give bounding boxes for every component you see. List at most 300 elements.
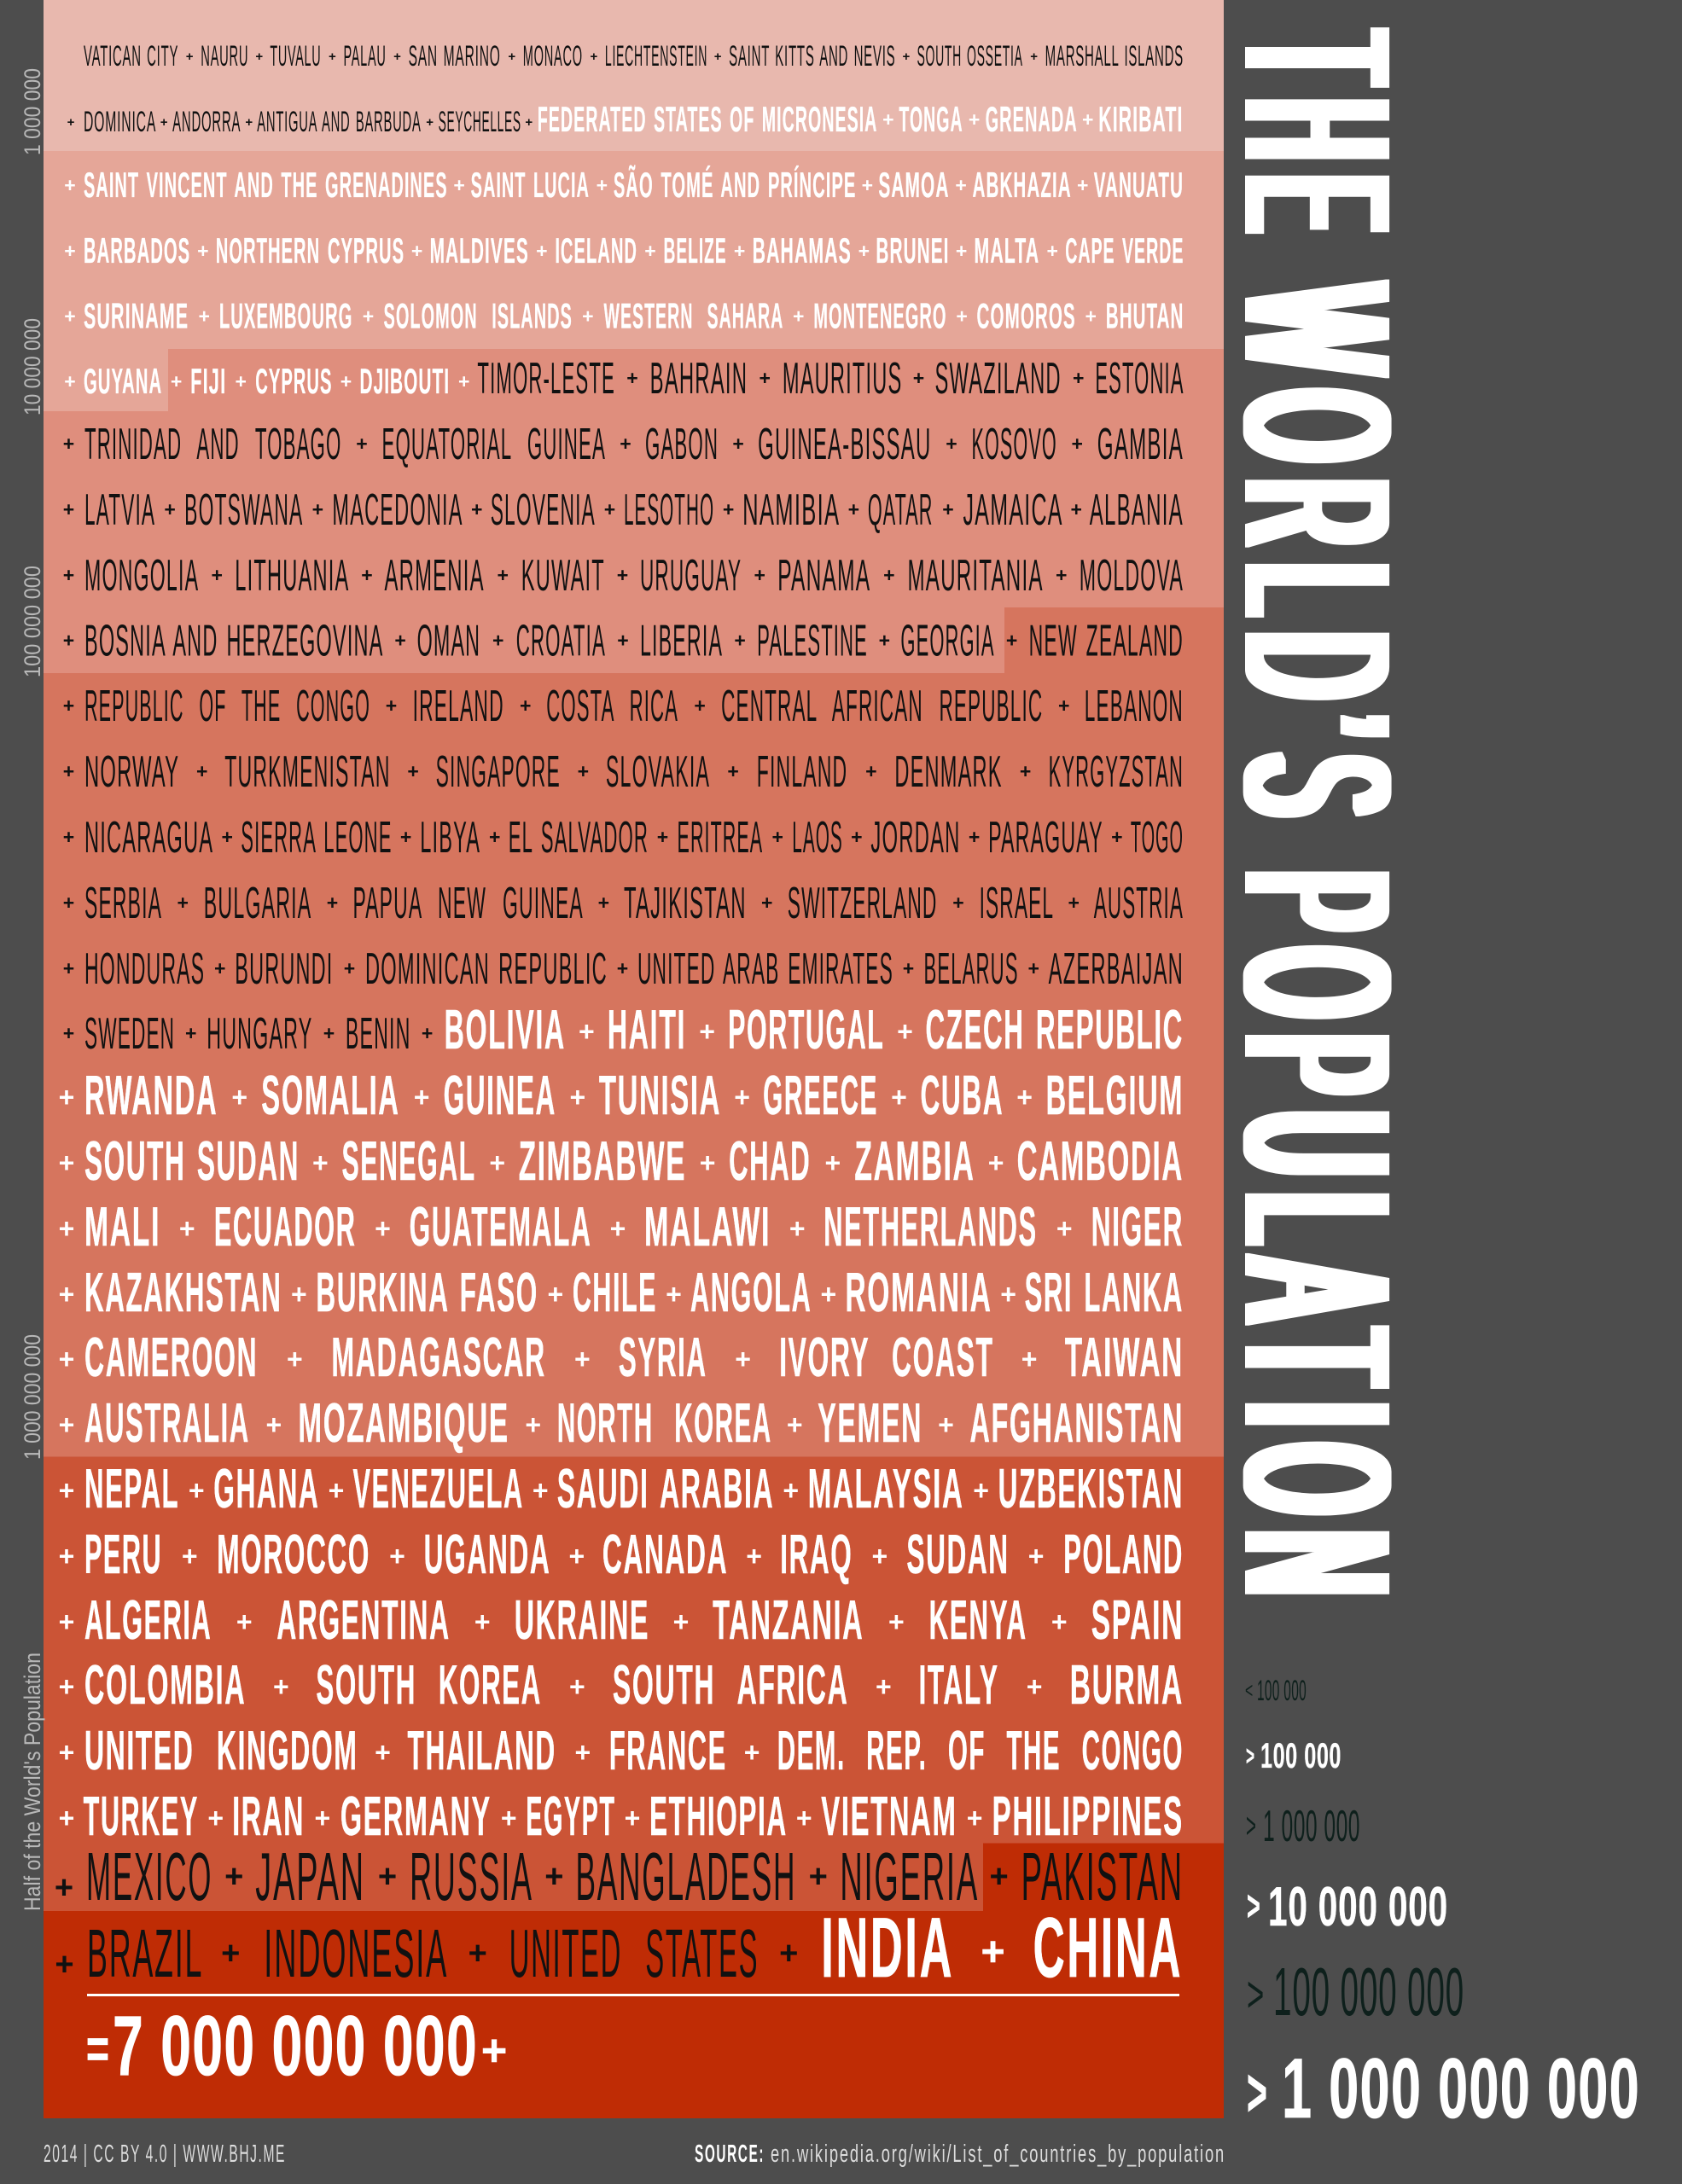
- row 27: United Kingdom to Dem. Rep. of the Congo: FRANCE: [609, 1719, 727, 1781]
- total: 7 000 000 000+: 7 000 000 000: [113, 1998, 478, 2093]
- legend item: over 100 000: >: [1246, 1740, 1255, 1771]
- row 16: Sweden to Czech Republic: ++++: [63, 1022, 433, 1044]
- row 18: South Sudan to Cambodia: CHAD: [729, 1130, 811, 1192]
- row 23: Nepal to Uzbekistan: SAUDI ARABIA: [557, 1457, 774, 1519]
- infographic: the world's population: AZERBAIJAN: [1049, 944, 1184, 994]
- row 15: Honduras to Azerbaijan: BELARUS: [923, 944, 1019, 994]
- row 4: Barbados to Cape Verde: BARBADOS: [84, 230, 190, 270]
- footer: source: en.wikipedia.org/wiki/List_of_countries_by_population: [771, 2140, 1225, 2168]
- row 5: Suriname to Bhutan: LUXEMBOURG: [219, 296, 352, 335]
- title: THE WORLD'S POPULATION: THE: [1203, 32, 1432, 247]
- row 29: Mexico to Pakistan: [55, 1838, 1184, 1914]
- row 22: Australia to Afghanistan: MOZAMBIQUE: [298, 1391, 509, 1454]
- row 11: Republic of the Congo to Lebanon: IRELAND: [413, 682, 504, 731]
- row 1: Vatican City to Marshall Islands: MONACO: [523, 40, 583, 73]
- row 30: Brazil to China: [55, 1900, 1183, 1995]
- row 18: South Sudan to Cambodia: ZAMBIA: [854, 1130, 975, 1192]
- axis labels: cumulative population: 1 000 000: [20, 68, 45, 155]
- row 10: Bosnia and Herzegovina to New Zealand: BOSNIA AND HERZEGOVINA: [84, 617, 384, 665]
- row 11: Republic of the Congo to Lebanon: [63, 682, 1184, 731]
- row 21: Cameroon to Taiwan: SYRIA: [619, 1326, 707, 1388]
- row 16: Sweden to Czech Republic: [63, 998, 1184, 1060]
- row 14: Serbia to Austria: TAJIKISTAN: [624, 879, 747, 928]
- row 20: Kazakhstan to Sri Lanka: BURKINA FASO: [316, 1261, 538, 1323]
- legend item: over 10 000 000: >: [1247, 1882, 1261, 1930]
- row 14: Serbia to Austria: SERBIA: [84, 879, 162, 928]
- band: over 100 000: [44, 151, 1224, 411]
- row 8: Latvia to Albania: LESOTHO: [624, 485, 714, 535]
- row 25: Algeria to Spain: KENYA: [928, 1589, 1027, 1651]
- row 22: Australia to Afghanistan: +++++: [59, 1409, 954, 1440]
- row 28: Turkey to Philippines: +++++++: [59, 1803, 982, 1833]
- total: 7 000 000 000+: +: [481, 2026, 507, 2076]
- row 15: Honduras to Azerbaijan: DOMINICAN REPUBLIC: [365, 944, 608, 994]
- row 12: Norway to Kyrgyzstan: TURKMENISTAN: [224, 747, 391, 797]
- row 6: Guyana to Estonia: [64, 354, 1184, 404]
- row 5: Suriname to Bhutan: SOLOMON ISLANDS: [384, 296, 573, 335]
- row 22: Australia to Afghanistan: YEMEN: [818, 1391, 922, 1454]
- legend: population size scale: 100 000 000: [1273, 1954, 1464, 2030]
- row 6: Guyana to Estonia: ++++: [626, 367, 1084, 389]
- row 23: Nepal to Uzbekistan: ++++++: [59, 1475, 989, 1506]
- row 1: Vatican City to Marshall Islands: VATICAN CITY: [84, 40, 178, 73]
- row 16: Sweden to Czech Republic: HUNGARY: [207, 1009, 312, 1059]
- row 8: Latvia to Albania: +++++++++: [63, 498, 1082, 520]
- row 19: Mali to Niger: [59, 1195, 1184, 1258]
- row 10: Bosnia and Herzegovina to New Zealand: OMAN: [417, 617, 480, 665]
- row 26: Colombia to Burma: SOUTH AFRICA: [613, 1653, 848, 1716]
- row 20: Kazakhstan to Sri Lanka: ANGOLA: [690, 1261, 812, 1323]
- row 22: Australia to Afghanistan: [59, 1391, 1184, 1454]
- infographic: the world's population: UZBEKISTAN: [998, 1457, 1184, 1519]
- row 13: Nicaragua to Togo: LAOS: [792, 813, 843, 863]
- row 2: Dominica to Kiribati: DOMINICA: [84, 106, 156, 138]
- row 13: Nicaragua to Togo: JORDAN: [870, 813, 961, 863]
- row 2: Dominica to Kiribati: GRENADA: [986, 99, 1078, 139]
- row 28: Turkey to Philippines: PHILIPPINES: [992, 1785, 1184, 1847]
- row 21: Cameroon to Taiwan: CAMEROON: [84, 1326, 258, 1388]
- row 16: Sweden to Czech Republic: HAITI: [608, 998, 686, 1060]
- row 13: Nicaragua to Togo: SIERRA LEONE: [241, 813, 393, 863]
- row 4: Barbados to Cape Verde: [64, 230, 1184, 270]
- row 13: Nicaragua to Togo: +++++++++: [63, 826, 1123, 848]
- infographic: the world's population: NIGER: [1091, 1195, 1184, 1258]
- row 20: Kazakhstan to Sri Lanka: CHILE: [573, 1261, 657, 1323]
- row 5: Suriname to Bhutan: +++++++: [64, 305, 1097, 327]
- axis labels: cumulative population: 1 000 000 000: [20, 1334, 45, 1460]
- row 28: Turkey to Philippines: ETHIOPIA: [649, 1785, 788, 1847]
- row 21: Cameroon to Taiwan: [59, 1326, 1184, 1388]
- row 9: Mongolia to Moldova: [63, 551, 1184, 601]
- row 26: Colombia to Burma: [59, 1653, 1184, 1716]
- row 12: Norway to Kyrgyzstan: SINGAPORE: [436, 747, 561, 797]
- row 11: Republic of the Congo to Lebanon: REPUBLIC OF THE CONGO: [84, 682, 370, 731]
- row 4: Barbados to Cape Verde: NORTHERN CYPRUS: [216, 230, 404, 270]
- row 8: Latvia to Albania: [63, 485, 1184, 535]
- row 2: Dominica to Kiribati: SEYCHELLES: [439, 106, 521, 138]
- row 9: Mongolia to Moldova: ARMENIA: [385, 551, 485, 601]
- row 29: Mexico to Pakistan: RUSSIA: [410, 1838, 533, 1914]
- row 18: South Sudan to Cambodia: ++++++: [59, 1147, 1004, 1178]
- row 7: Trinidad and Tobago to Gambia: [63, 420, 1184, 469]
- text block: country rows: [55, 40, 1184, 1995]
- row 7: Trinidad and Tobago to Gambia: EQUATORIAL GUINEA: [382, 420, 606, 469]
- footer: credit: 2014 | CC BY 4.0 | WWW.BHJ.ME: [44, 2140, 286, 2168]
- row 28: Turkey to Philippines: EGYPT: [526, 1785, 615, 1847]
- row 26: Colombia to Burma: ITALY: [918, 1653, 999, 1716]
- row 25: Algeria to Spain: UKRAINE: [515, 1589, 649, 1651]
- legend item: over 1 000 000 000: >: [1247, 2054, 1269, 2130]
- axis labels: cumulative population: Half of the World's Population: [20, 1653, 45, 1911]
- row 27: United Kingdom to Dem. Rep. of the Congo: UNITED KINGDOM: [84, 1719, 358, 1781]
- row 1: Vatican City to Marshall Islands: SAINT KITTS AND NEVIS: [729, 40, 895, 73]
- text block: country rows: BELGIUM: [1046, 1064, 1184, 1126]
- row 23: Nepal to Uzbekistan: NEPAL: [84, 1457, 179, 1519]
- row 11: Republic of the Congo to Lebanon: COSTA RICA: [546, 682, 678, 731]
- row 4: Barbados to Cape Verde: BAHAMAS: [753, 230, 852, 270]
- row 27: United Kingdom to Dem. Rep. of the Congo: [59, 1719, 1184, 1781]
- infographic: the world's population: SRI LANKA: [1025, 1261, 1184, 1323]
- row 19: Mali to Niger: MALI: [84, 1195, 160, 1258]
- row 14: Serbia to Austria: ISRAEL: [980, 879, 1054, 928]
- footer: source: SOURCE:: [695, 2140, 765, 2168]
- row 19: Mali to Niger: ++++++: [59, 1213, 1073, 1244]
- row 8: Latvia to Albania: NAMIBIA: [742, 485, 840, 535]
- row 25: Algeria to Spain: ARGENTINA: [276, 1589, 451, 1651]
- row 15: Honduras to Azerbaijan: BURUNDI: [235, 944, 333, 994]
- row 28: Turkey to Philippines: IRAN: [232, 1785, 305, 1847]
- row 13: Nicaragua to Togo: NICARAGUA: [84, 813, 213, 863]
- infographic: the world's population: ESTONIA: [1095, 354, 1184, 404]
- row 24: Peru to Poland: [59, 1523, 1184, 1585]
- row 22: Australia to Afghanistan: AUSTRALIA: [84, 1391, 250, 1454]
- row 28: Turkey to Philippines: GERMANY: [340, 1785, 492, 1847]
- row 9: Mongolia to Moldova: ++++++++: [63, 564, 1067, 586]
- row 8: Latvia to Albania: BOTSWANA: [184, 485, 303, 535]
- row 29: Mexico to Pakistan: NIGERIA: [840, 1838, 979, 1914]
- band: over 100 000 000: [44, 1457, 1224, 1911]
- infographic: the world's population: DEM. REP. OF THE CONGO: [777, 1719, 1184, 1781]
- legend: population size scale: 100 000: [1257, 1675, 1307, 1707]
- infographic: the world's population: KYRGYZSTAN: [1049, 747, 1184, 797]
- row 10: Bosnia and Herzegovina to New Zealand: +++++++: [63, 630, 1017, 651]
- row 17: Rwanda to Belgium: GUINEA: [444, 1064, 556, 1126]
- row 15: Honduras to Azerbaijan: ++++++: [63, 957, 1039, 979]
- row 6: Guyana to Estonia: MAURITIUS: [783, 354, 902, 404]
- row 1: Vatican City to Marshall Islands: +++++++++: [186, 49, 1038, 64]
- legend: population size scale: 1 000 000: [1263, 1802, 1360, 1851]
- row 4: Barbados to Cape Verde: BRUNEI: [876, 230, 950, 270]
- row 16: Sweden to Czech Republic: +++: [579, 1016, 913, 1047]
- title: THE WORLD'S POPULATION: WORLD’S: [1203, 286, 1432, 834]
- text block: country rows: VANUATU: [1094, 165, 1184, 205]
- infographic: the world's population: TOGO: [1131, 813, 1184, 863]
- row 13: Nicaragua to Togo: LIBYA: [420, 813, 480, 863]
- row 6: Guyana to Estonia: DJIBOUTI: [359, 361, 450, 401]
- band: over 10 000 000: [44, 607, 1224, 1457]
- row 24: Peru to Poland: IRAQ: [780, 1523, 853, 1585]
- row 28: Turkey to Philippines: VIETNAM: [821, 1785, 957, 1847]
- row 19: Mali to Niger: MALAWI: [644, 1195, 771, 1258]
- axis labels: cumulative population: 100 000 000: [20, 566, 45, 677]
- row 26: Colombia to Burma: SOUTH KOREA: [316, 1653, 542, 1716]
- row 12: Norway to Kyrgyzstan: NORWAY: [84, 747, 179, 797]
- legend: population size scale: [1245, 1675, 1640, 2135]
- row 29: Mexico to Pakistan: BANGLADESH: [575, 1838, 796, 1914]
- row 10: Bosnia and Herzegovina to New Zealand: GEORGIA: [900, 617, 995, 665]
- infographic: the world's population: MOLDOVA: [1080, 551, 1184, 601]
- row 1: Vatican City to Marshall Islands: PALAU: [343, 40, 387, 73]
- row 19: Mali to Niger: NETHERLANDS: [824, 1195, 1038, 1258]
- row 14: Serbia to Austria: +++++++: [63, 892, 1080, 914]
- row 19: Mali to Niger: GUATEMALA: [410, 1195, 591, 1258]
- row 17: Rwanda to Belgium: [59, 1064, 1184, 1126]
- row 24: Peru to Poland: MOROCCO: [217, 1523, 370, 1585]
- row 18: South Sudan to Cambodia: SENEGAL: [341, 1130, 476, 1192]
- infographic: the world's population: AFGHANISTAN: [970, 1391, 1184, 1454]
- row 25: Algeria to Spain: [59, 1589, 1184, 1651]
- row 30: Brazil to China: BRAZIL: [87, 1915, 203, 1991]
- row 8: Latvia to Albania: LATVIA: [84, 485, 155, 535]
- footer: source: [695, 2140, 1225, 2168]
- row 25: Algeria to Spain: ALGERIA: [84, 1589, 212, 1651]
- row 28: Turkey to Philippines: TURKEY: [84, 1785, 199, 1847]
- legend item: over 1 000 000: >: [1246, 1805, 1257, 1845]
- row 6: Guyana to Estonia: BAHRAIN: [650, 354, 748, 404]
- row 13: Nicaragua to Togo: EL SALVADOR: [509, 813, 649, 863]
- infographic: the world's population: POLAND: [1063, 1523, 1184, 1585]
- row 26: Colombia to Burma: BURMA: [1070, 1653, 1184, 1716]
- row 9: Mongolia to Moldova: MONGOLIA: [84, 551, 199, 601]
- row 10: Bosnia and Herzegovina to New Zealand: LIBERIA: [640, 617, 723, 665]
- row 6: Guyana to Estonia: GUYANA: [84, 361, 162, 401]
- total: 7 000 000 000+: =: [86, 2017, 109, 2080]
- row 14: Serbia to Austria: [63, 879, 1184, 928]
- row 2: Dominica to Kiribati: ANTIGUA AND BARBUDA: [257, 106, 422, 138]
- row 12: Norway to Kyrgyzstan: [63, 747, 1184, 797]
- row 6: Guyana to Estonia: FIJI: [190, 361, 226, 401]
- row 13: Nicaragua to Togo: PARAGUAY: [988, 813, 1103, 863]
- row 15: Honduras to Azerbaijan: [63, 944, 1184, 994]
- row 7: Trinidad and Tobago to Gambia: GABON: [645, 420, 719, 469]
- row 7: Trinidad and Tobago to Gambia: TRINIDAD AND TOBAGO: [84, 420, 341, 469]
- row 10: Bosnia and Herzegovina to New Zealand: [63, 617, 1184, 665]
- row 30: Brazil to China: +: [981, 1930, 1005, 1975]
- row 30: Brazil to China: INDONESIA: [264, 1915, 448, 1991]
- row 18: South Sudan to Cambodia: CAMBODIA: [1017, 1130, 1184, 1192]
- row 27: United Kingdom to Dem. Rep. of the Congo: THAILAND: [408, 1719, 556, 1781]
- infographic: the world's population: NEW ZEALAND: [1029, 617, 1184, 665]
- legend item: over 100 000 000: >: [1247, 1966, 1266, 2023]
- row 18: South Sudan to Cambodia: [59, 1130, 1184, 1192]
- row 24: Peru to Poland: PERU: [84, 1523, 162, 1585]
- legend item: over 100 000: 100 000: [1260, 1735, 1342, 1775]
- row 1: Vatican City to Marshall Islands: SOUTH OSSETIA: [917, 40, 1023, 73]
- row 16: Sweden to Czech Republic: BENIN: [346, 1009, 411, 1059]
- row 21: Cameroon to Taiwan: IVORY COAST: [779, 1326, 994, 1388]
- row 2: Dominica to Kiribati: +++: [882, 108, 1093, 131]
- row 26: Colombia to Burma: COLOMBIA: [84, 1653, 246, 1716]
- row 9: Mongolia to Moldova: LITHUANIA: [235, 551, 349, 601]
- legend item: under 100 000: <: [1245, 1677, 1254, 1703]
- total rule: [87, 1994, 1179, 1996]
- row 9: Mongolia to Moldova: KUWAIT: [521, 551, 605, 601]
- row 24: Peru to Poland: UGANDA: [424, 1523, 550, 1585]
- row 29: Mexico to Pakistan: MEXICO: [86, 1838, 212, 1914]
- row 13: Nicaragua to Togo: ERITREA: [678, 813, 763, 863]
- row 17: Rwanda to Belgium: +++++++: [59, 1082, 1033, 1112]
- row 3: Saint Vincent to Vanuatu: SAINT LUCIA: [471, 165, 590, 205]
- row 9: Mongolia to Moldova: URUGUAY: [640, 551, 742, 601]
- row 6: Guyana to Estonia: SWAZILAND: [934, 354, 1062, 404]
- row 3: Saint Vincent to Vanuatu: [64, 165, 1184, 205]
- infographic: the world's population: BHUTAN: [1106, 296, 1184, 335]
- row 19: Mali to Niger: ECUADOR: [214, 1195, 356, 1258]
- row 8: Latvia to Albania: MACEDONIA: [332, 485, 463, 535]
- row 27: United Kingdom to Dem. Rep. of the Congo: ++++: [59, 1737, 760, 1768]
- legend item: over 10 000 000: 10 000 000: [1268, 1875, 1448, 1937]
- row 16: Sweden to Czech Republic: PORTUGAL: [728, 998, 884, 1060]
- row 21: Cameroon to Taiwan: TAIWAN: [1065, 1326, 1184, 1388]
- row 17: Rwanda to Belgium: GREECE: [763, 1064, 878, 1126]
- row 3: Saint Vincent to Vanuatu: SAINT VINCENT AND THE GRENADINES: [84, 165, 448, 205]
- row 23: Nepal to Uzbekistan: MALAYSIA: [808, 1457, 964, 1519]
- legend item: over 1 000 000: [1246, 1802, 1360, 1851]
- row 21: Cameroon to Taiwan: +++++: [59, 1344, 1038, 1374]
- row 2: Dominica to Kiribati: TONGA: [899, 99, 963, 139]
- band: under 100 000: [44, 0, 1224, 151]
- row 4: Barbados to Cape Verde: MALDIVES: [430, 230, 529, 270]
- row 3: Saint Vincent to Vanuatu: ++++++: [64, 174, 1088, 196]
- row 20: Kazakhstan to Sri Lanka: ROMANIA: [845, 1261, 992, 1323]
- row 18: South Sudan to Cambodia: ZIMBABWE: [519, 1130, 686, 1192]
- infographic: the world's population: PAKISTAN: [1021, 1838, 1184, 1914]
- row 30: Brazil to China: CHINA: [1033, 1900, 1183, 1995]
- axis labels: cumulative population: [20, 68, 45, 1911]
- row 7: Trinidad and Tobago to Gambia: KOSOVO: [972, 420, 1057, 469]
- row 5: Suriname to Bhutan: COMOROS: [977, 296, 1076, 335]
- row 20: Kazakhstan to Sri Lanka: KAZAKHSTAN: [84, 1261, 282, 1323]
- row 20: Kazakhstan to Sri Lanka: ++++++: [59, 1279, 1016, 1310]
- row 29: Mexico to Pakistan: +: [55, 1870, 73, 1906]
- row 15: Honduras to Azerbaijan: HONDURAS: [84, 944, 205, 994]
- row 6: Guyana to Estonia: TIMOR-LESTE: [477, 354, 615, 404]
- row 24: Peru to Poland: CANADA: [602, 1523, 728, 1585]
- row 25: Algeria to Spain: SPAIN: [1091, 1589, 1184, 1651]
- row 1: Vatican City to Marshall Islands: LIECHTENSTEIN: [605, 40, 707, 73]
- row 14: Serbia to Austria: PAPUA NEW GUINEA: [352, 879, 584, 928]
- infographic: the world's population: ALBANIA: [1090, 485, 1184, 535]
- row 20: Kazakhstan to Sri Lanka: [59, 1261, 1184, 1323]
- row 8: Latvia to Albania: QATAR: [868, 485, 933, 535]
- row 2: Dominica to Kiribati: +++++: [67, 115, 533, 130]
- row 10: Bosnia and Herzegovina to New Zealand: PALESTINE: [757, 617, 868, 665]
- row 15: Honduras to Azerbaijan: UNITED ARAB EMIRATES: [637, 944, 893, 994]
- legend item: under 100 000: [1245, 1675, 1307, 1707]
- row 17: Rwanda to Belgium: CUBA: [920, 1064, 1004, 1126]
- panel: stacked population bands: [44, 0, 1224, 2118]
- row 6: Guyana to Estonia: CYPRUS: [255, 361, 332, 401]
- row 2: Dominica to Kiribati: ANDORRA: [172, 106, 241, 138]
- row 18: South Sudan to Cambodia: SOUTH SUDAN: [84, 1130, 300, 1192]
- row 3: Saint Vincent to Vanuatu: SÃO TOMÉ AND PRÍNCIPE: [614, 165, 856, 205]
- row 30: Brazil to China: UNITED STATES: [509, 1915, 759, 1991]
- row 4: Barbados to Cape Verde: BELIZE: [664, 230, 727, 270]
- row 25: Algeria to Spain: TANZANIA: [713, 1589, 864, 1651]
- row 9: Mongolia to Moldova: PANAMA: [777, 551, 870, 601]
- row 1: Vatican City to Marshall Islands: [84, 40, 1184, 73]
- row 17: Rwanda to Belgium: RWANDA: [84, 1064, 218, 1126]
- row 1: Vatican City to Marshall Islands: SAN MARINO: [409, 40, 501, 73]
- row 29: Mexico to Pakistan: +++++: [224, 1859, 1009, 1895]
- row 5: Suriname to Bhutan: WESTERN SAHARA: [604, 296, 783, 335]
- row 24: Peru to Poland: +++++++: [59, 1541, 1045, 1571]
- row 28: Turkey to Philippines: [59, 1785, 1184, 1847]
- row 12: Norway to Kyrgyzstan: DENMARK: [894, 747, 1003, 797]
- row 1: Vatican City to Marshall Islands: NAURU: [201, 40, 248, 73]
- row 16: Sweden to Czech Republic: SWEDEN: [84, 1009, 175, 1059]
- infographic: the world's population: CAPE VERDE: [1065, 230, 1184, 270]
- row 26: Colombia to Burma: +++++: [59, 1671, 1043, 1702]
- row 16: Sweden to Czech Republic: BOLIVIA: [445, 998, 566, 1060]
- row 17: Rwanda to Belgium: SOMALIA: [261, 1064, 400, 1126]
- row 8: Latvia to Albania: SLOVENIA: [491, 485, 596, 535]
- row 12: Norway to Kyrgyzstan: FINLAND: [757, 747, 847, 797]
- row 23: Nepal to Uzbekistan: [59, 1457, 1184, 1519]
- row 5: Suriname to Bhutan: [64, 296, 1184, 335]
- row 8: Latvia to Albania: JAMAICA: [963, 485, 1063, 535]
- row 25: Algeria to Spain: ++++++: [59, 1606, 1068, 1637]
- row 2: Dominica to Kiribati: [67, 99, 1183, 139]
- row 12: Norway to Kyrgyzstan: SLOVAKIA: [606, 747, 710, 797]
- row 22: Australia to Afghanistan: NORTH KOREA: [557, 1391, 772, 1454]
- band: over 1 000 000 000: [44, 1843, 1224, 2118]
- row 30: Brazil to China: +++: [221, 1936, 798, 1972]
- row 14: Serbia to Austria: BULGARIA: [204, 879, 311, 928]
- axis labels: cumulative population: 10 000 000: [20, 318, 45, 415]
- infographic: the world's population: GAMBIA: [1097, 420, 1184, 469]
- row 9: Mongolia to Moldova: MAURITANIA: [907, 551, 1044, 601]
- row 24: Peru to Poland: SUDAN: [906, 1523, 1010, 1585]
- row 1: Vatican City to Marshall Islands: TUVALU: [270, 40, 321, 73]
- row 30: Brazil to China: +: [55, 1947, 74, 1983]
- row 7: Trinidad and Tobago to Gambia: GUINEA-BISSAU: [758, 420, 931, 469]
- row 2: Dominica to Kiribati: FEDERATED STATES OF MICRONESIA: [538, 99, 877, 139]
- row 5: Suriname to Bhutan: SURINAME: [84, 296, 189, 335]
- row 14: Serbia to Austria: SWITZERLAND: [788, 879, 937, 928]
- row 11: Republic of the Congo to Lebanon: +++++: [63, 694, 1069, 717]
- row 23: Nepal to Uzbekistan: VENEZUELA: [352, 1457, 524, 1519]
- band: over 1 000 000: [44, 349, 1224, 673]
- row 10: Bosnia and Herzegovina to New Zealand: CROATIA: [516, 617, 606, 665]
- total: 7 000 000 000+: [86, 1998, 507, 2093]
- row 6: Guyana to Estonia: +++++: [64, 370, 469, 392]
- row 17: Rwanda to Belgium: TUNISIA: [599, 1064, 721, 1126]
- row 29: Mexico to Pakistan: JAPAN: [255, 1838, 365, 1914]
- infographic: the world's population: CZECH REPUBLIC: [925, 998, 1184, 1060]
- row 13: Nicaragua to Togo: [63, 813, 1184, 863]
- row 4: Barbados to Cape Verde: ICELAND: [555, 230, 637, 270]
- row 30: Brazil to China: INDIA: [821, 1900, 954, 1995]
- legend item: over 100 000 000: [1247, 1954, 1464, 2030]
- row 7: Trinidad and Tobago to Gambia: ++++++: [63, 433, 1083, 455]
- row 3: Saint Vincent to Vanuatu: SAMOA: [878, 165, 950, 205]
- row 11: Republic of the Congo to Lebanon: CENTRAL AFRICAN REPUBLIC: [721, 682, 1043, 731]
- infographic: the world's population: MARSHALL ISLANDS: [1045, 40, 1184, 73]
- row 4: Barbados to Cape Verde: +++++++++: [64, 240, 1058, 262]
- infographic: the world's population: LEBANON: [1085, 682, 1184, 731]
- row 4: Barbados to Cape Verde: MALTA: [975, 230, 1039, 270]
